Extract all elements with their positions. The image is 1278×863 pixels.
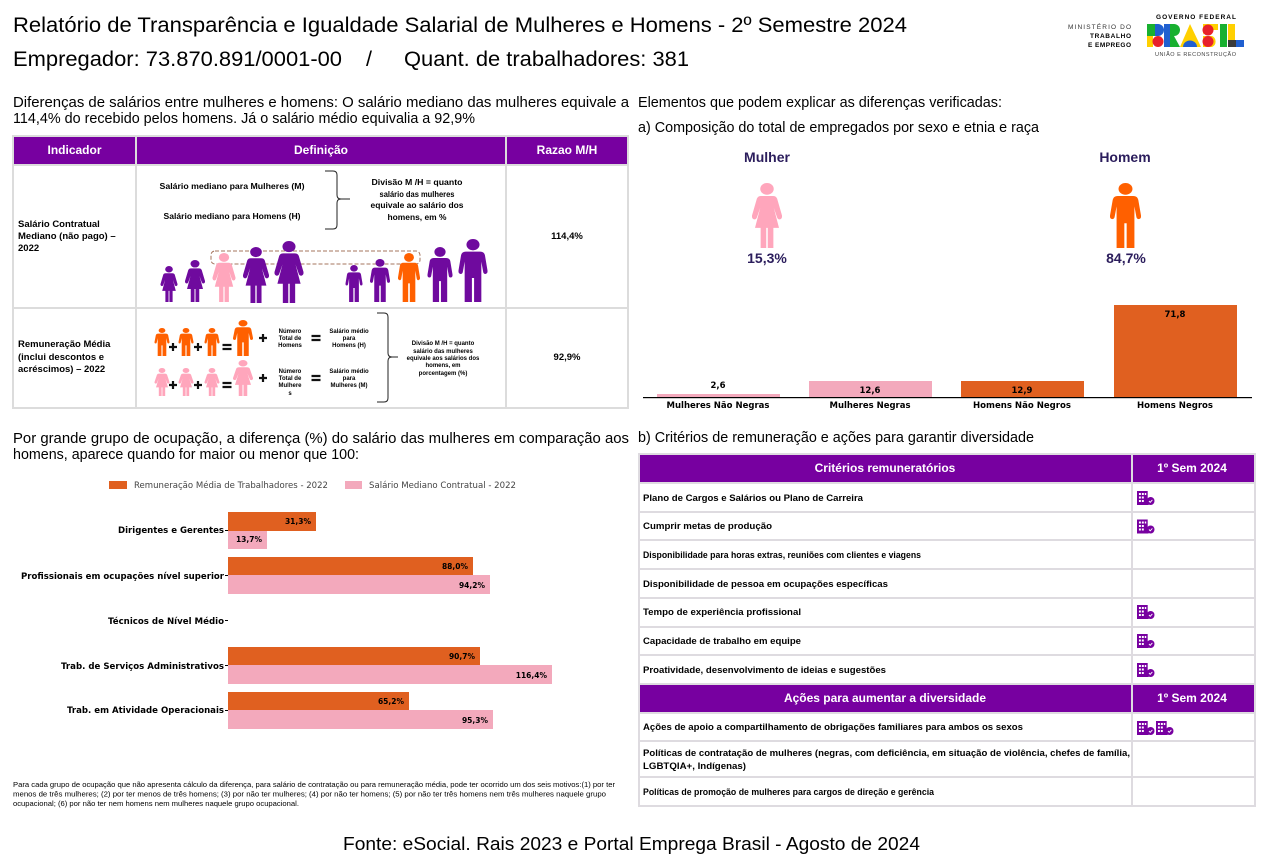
- title: Relatório de Transparência e Igualdade Salarial de Mulheres e Homens - 2º Semestre 2024: [13, 13, 907, 37]
- bar chart: occupation groups: [21, 512, 552, 729]
- group: atividade operacional: 95,3%: [462, 716, 488, 725]
- definition text: division M/H: equivale ao salário dos: [370, 200, 464, 210]
- bar chart: sex and race composition: [643, 305, 1252, 411]
- heading: explanatory elements: Elementos que podem explicar as diferenças verificadas:: [638, 95, 1002, 111]
- group: serviços administrativos: [61, 647, 552, 684]
- panel: man share: 84,7%: [1106, 250, 1146, 266]
- table header labels: Razao M/H: [537, 143, 597, 157]
- icon: dashed median highlight: [211, 251, 420, 264]
- definition text: division M/H row 2: equivale aos salários dos: [407, 356, 480, 362]
- footnote: menos de três mulheres; (2) por ter menos de três homens; (3) por não ter mulheres; (4) por não ter homens; (5) por não ter três homens nem três mulheres naquele grupo: [13, 790, 606, 798]
- icon: row of men: [345, 239, 488, 302]
- bar: homens não negros: [961, 381, 1084, 411]
- actions header: [640, 685, 1254, 712]
- definition text: division M/H row 2: porcentagem (%): [419, 371, 467, 377]
- panel: woman share: [744, 149, 790, 266]
- panel: man share: [1099, 149, 1151, 266]
- definition text: division M/H row 2: Divisão M /H = quanto: [412, 341, 475, 347]
- actions rows text: Ações de apoio a compartilhamento de obrigações familiares para ambos os sexos: [643, 722, 1023, 733]
- employer line: Quant. de trabalhadores: 381: [404, 47, 689, 71]
- icon: row of women: [160, 241, 304, 303]
- actions header: Ações para aumentar a diversidade: [784, 691, 986, 705]
- criteria rows text: Capacidade de trabalho em equipe: [643, 636, 801, 647]
- definition text: median salaries: [160, 181, 305, 221]
- text: número total de homens: Homens: [278, 343, 302, 349]
- row label: salário contratual mediano: [18, 219, 116, 254]
- group: serviços administrativos: 90,7%: [449, 652, 475, 661]
- logo: ministério do trabalho e emprego: E EMPREGO: [1088, 42, 1131, 49]
- text: salário médio para mulheres: [329, 369, 369, 389]
- text: salário médio para mulheres: para: [343, 376, 356, 382]
- actions header: 1º Sem 2024: [1157, 691, 1227, 705]
- chart legend: [109, 480, 516, 491]
- text: salário médio para homens: Salário médio: [329, 329, 369, 335]
- chart legend: Salário Mediano Contratual - 2022: [369, 481, 516, 491]
- footnote: ocupacional; (6) por não ter nem homens nem mulheres naquele grupo ocupacional.: [13, 799, 299, 808]
- table header labels: [47, 143, 597, 157]
- text: salário médio para mulheres: Mulheres (M): [330, 383, 368, 389]
- actions rows text: Políticas de promoção de mulheres para cargos de direção e gerência: [643, 787, 935, 798]
- definition text: division M/H: Divisão M /H = quanto: [372, 177, 462, 187]
- definition text: division M/H row 2: homens, em: [425, 363, 461, 369]
- text: salário médio para homens: Homens (H): [332, 343, 366, 349]
- group: profissionais: Profissionais em ocupações nível superior: [21, 572, 225, 582]
- text: número total de mulheres: Total de: [279, 376, 302, 382]
- group: profissionais: 94,2%: [459, 581, 485, 590]
- text: número total de mulheres: Número: [279, 369, 302, 375]
- bar: homens negros: Homens Negros: [1137, 401, 1213, 411]
- actions icons: company building: [1137, 721, 1174, 735]
- bar: mulheres negras: 12,6: [860, 386, 881, 396]
- row label: salário contratual mediano: Salário Contratual: [18, 219, 100, 230]
- text: salário médio para homens: [329, 329, 369, 349]
- actions rows text: Políticas de contratação de mulheres (negras, com deficiência, em situação de violência, chefes de família,: [643, 748, 1130, 759]
- bar: homens negros: 71,8: [1165, 310, 1186, 320]
- text: salário médio para mulheres: Salário médio: [329, 369, 369, 375]
- bar: homens negros: [1114, 305, 1237, 411]
- group: profissionais: 88,0%: [442, 562, 468, 571]
- heading: occupation groups: [13, 431, 629, 463]
- title: [13, 13, 907, 71]
- row label: remuneração média: acréscimos) – 2022: [18, 364, 105, 375]
- criteria rows text: [643, 493, 921, 676]
- group: profissionais: [21, 557, 490, 594]
- definition text: division M/H row 2: salário das mulheres: [413, 349, 474, 355]
- icon: curly brace row 2: [377, 313, 398, 402]
- group: dirigentes e gerentes: 31,3%: [285, 517, 311, 526]
- bar: mulheres negras: Mulheres Negras: [830, 401, 910, 411]
- text: número total de mulheres: Mulhere: [278, 383, 302, 389]
- group: serviços administrativos: 116,4%: [516, 671, 547, 680]
- panel: criteria table: [638, 453, 1256, 807]
- group: dirigentes e gerentes: 13,7%: [236, 535, 262, 544]
- definition text: median salaries: Salário mediano para Homens (H): [164, 211, 301, 221]
- criteria rows text: Tempo de experiência profissional: [643, 607, 801, 618]
- group: atividade operacional: [67, 692, 493, 729]
- criteria rows text: Plano de Cargos e Salários ou Plano de Carreira: [643, 493, 864, 504]
- criteria rows text: Disponibilidade de pessoa em ocupações específicas: [643, 579, 888, 590]
- logo: ministério do trabalho e emprego: [1068, 22, 1131, 49]
- group: atividade operacional: 65,2%: [378, 697, 404, 706]
- chart baseline: [643, 397, 1252, 398]
- group: dirigentes e gerentes: [118, 512, 316, 549]
- actions rows text: [643, 722, 1130, 798]
- definition text: division M/H: homens, em %: [388, 212, 447, 222]
- criteria header: [640, 455, 1254, 482]
- chart legend: Remuneração Média de Trabalhadores - 2022: [134, 480, 328, 491]
- group: dirigentes e gerentes: Dirigentes e Gerentes: [118, 526, 224, 536]
- row label: salário contratual mediano: 2022: [18, 243, 39, 254]
- panel: man share: Homem: [1099, 149, 1151, 165]
- employer line: /: [366, 47, 372, 71]
- logo: ministério do trabalho e emprego: TRABALHO: [1090, 33, 1131, 40]
- definition text: division M/H row 2: [407, 341, 480, 377]
- bar: homens não negros: 12,9: [1012, 386, 1033, 396]
- panel: woman share: 15,3%: [747, 250, 787, 266]
- subheading: a) composition: a) Composição do total de empregados por sexo e etnia e raça: [638, 120, 1040, 136]
- text: salário médio para homens: para: [343, 336, 356, 342]
- criteria rows text: Cumprir metas de produção: [643, 521, 772, 532]
- subheading: b) criteria: b) Critérios de remuneração e ações para garantir diversidade: [638, 430, 1034, 446]
- text: número total de mulheres: s: [288, 391, 292, 397]
- criteria header: Critérios remuneratórios: [815, 461, 956, 475]
- definition text: division M/H: salário das mulheres: [380, 189, 455, 199]
- row label: salário contratual mediano: Mediano (não pago) –: [18, 231, 116, 242]
- definition text: division M/H: [370, 177, 464, 222]
- criteria rows text: Disponibilidade para horas extras, reuniões com clientes e viagens: [643, 550, 921, 561]
- source footer: Fonte: eSocial. Rais 2023 e Portal Emprega Brasil - Agosto de 2024: [343, 833, 920, 854]
- heading: occupation groups: Por grande grupo de ocupação, a diferença (%) do salário das mulheres em comparação aos: [13, 431, 629, 447]
- criteria icons: company building: [1137, 491, 1154, 677]
- intro text: differences in salaries: Diferenças de salários entre mulheres e homens: O salário mediano das mulheres equivale a: [13, 95, 630, 111]
- row label: remuneração média: [18, 339, 111, 375]
- actions rows text: LGBTQIA+, Indígenas): [643, 761, 746, 772]
- footnote: Para cada grupo de ocupação que não apresenta cálculo da diferença, para salário de contratação ou para remuneração média, pode ter ocorrido um dos seis motivos:(1) por ter: [13, 780, 616, 789]
- criteria header: 1º Sem 2024: [1157, 461, 1227, 475]
- criteria rows text: Proatividade, desenvolvimento de ideias e sugestões: [643, 665, 886, 676]
- icon: women sum equation: [154, 360, 320, 396]
- group: atividade operacional: Trab. em Atividade Operacionais: [67, 706, 224, 716]
- intro text: differences in salaries: 114,4% do recebido pelos homens. Já o salário médio equivalia a 92,9%: [13, 111, 475, 127]
- bar: mulheres negras: [809, 381, 932, 411]
- value: 92,9%: 92,9%: [554, 352, 581, 363]
- group: serviços administrativos: Trab. de Serviços Administrativos: [61, 662, 224, 672]
- row label: remuneração média: Remuneração Média: [18, 339, 111, 350]
- bar: homens não negros: Homens Não Negros: [973, 401, 1071, 411]
- heading: occupation groups: homens, aparece quando for maior ou menor que 100:: [13, 447, 359, 463]
- bar: mulheres não negras: [657, 381, 780, 411]
- logo: governo federal brasil: GOVERNO FEDERAL: [1156, 14, 1236, 21]
- row label: remuneração média: (inclui descontos e: [18, 352, 104, 363]
- panel: indicator table: [12, 135, 629, 409]
- employer line: [13, 47, 689, 71]
- icon: men sum equation: [154, 320, 320, 356]
- definition text: median salaries: Salário mediano para Mulheres (M): [160, 181, 305, 191]
- bar: mulheres não negras: Mulheres Não Negras: [666, 401, 770, 411]
- text: número total de homens: Número: [279, 329, 302, 335]
- logo: ministério do trabalho e emprego: MINISTÉRIO DO: [1068, 22, 1131, 31]
- employer line: Empregador: 73.870.891/0001-00: [13, 47, 342, 71]
- text: número total de homens: Total de: [279, 336, 302, 342]
- logo: governo federal brasil: UNIÃO E RECONSTRUÇÃO: [1155, 51, 1237, 58]
- value: 114,4%: 114,4%: [551, 231, 583, 242]
- footnote: [13, 780, 616, 808]
- logo: governo federal brasil: [1147, 14, 1244, 58]
- text: número total de mulheres: [278, 369, 302, 397]
- bar: mulheres não negras: 2,6: [710, 381, 726, 391]
- icon: curly brace: [325, 171, 350, 229]
- panel: woman share: Mulher: [744, 149, 790, 165]
- table header labels: Definição: [294, 143, 348, 157]
- group: técnicos: Técnicos de Nível Médio: [108, 616, 224, 627]
- intro text: differences in salaries: [13, 95, 630, 127]
- text: número total de homens: [278, 329, 302, 349]
- table header labels: Indicador: [47, 143, 102, 157]
